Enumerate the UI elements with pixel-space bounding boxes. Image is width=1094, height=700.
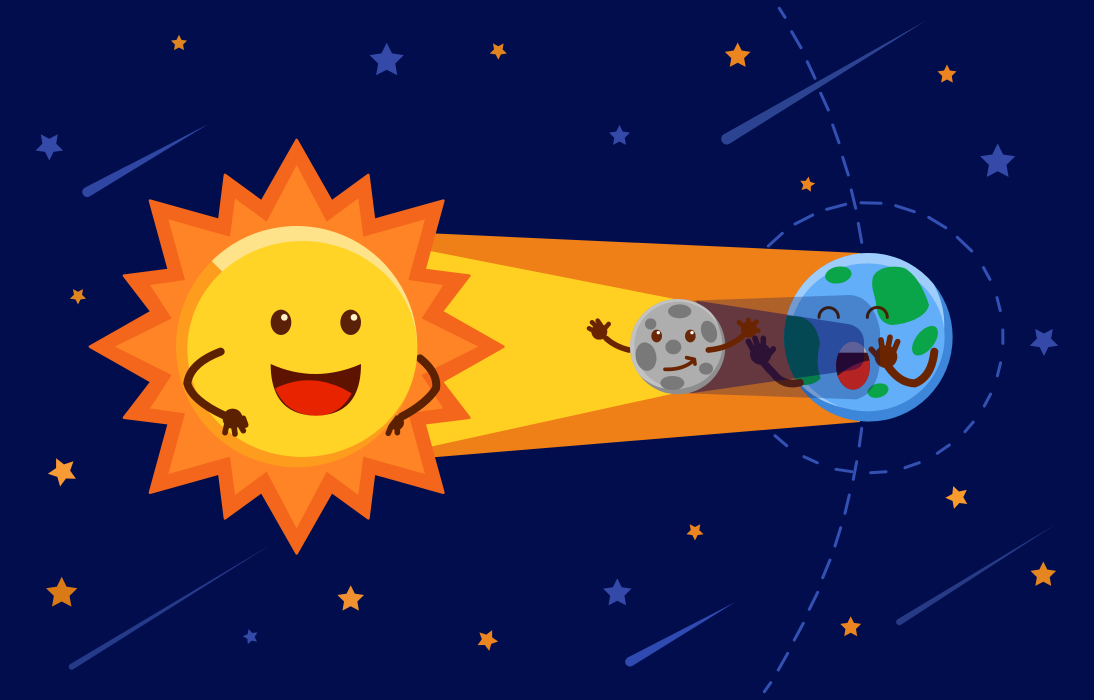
orbit paths xyxy=(764,8,1003,692)
shooting star: upper right xyxy=(719,16,929,147)
moon: smile xyxy=(665,358,695,369)
earth character xyxy=(748,241,953,422)
shadow: penumbra xyxy=(688,295,880,399)
sun character xyxy=(90,140,503,553)
moon: craters xyxy=(633,304,720,390)
moon character xyxy=(589,294,758,394)
shooting star: upper left xyxy=(80,120,211,199)
sun: right arm behind disc xyxy=(388,358,436,433)
shooting star: lower left xyxy=(68,542,273,671)
sun: outer rays xyxy=(90,140,503,553)
small dashed orbit around earth xyxy=(768,203,1003,473)
earth: left arm and hand xyxy=(748,338,800,384)
shooting star: lower right xyxy=(895,521,1058,626)
shadow: umbra xyxy=(690,301,864,393)
moon: body xyxy=(626,294,725,394)
earth: continents xyxy=(778,264,943,400)
beam: yellow inner xyxy=(420,249,690,449)
sun: disc xyxy=(176,226,417,467)
sun: smiling mouth xyxy=(271,364,361,416)
large dashed orbit xyxy=(764,8,862,692)
shooting star: lower middle xyxy=(623,598,738,668)
moon shadow xyxy=(688,295,880,399)
earth: open mouth xyxy=(836,342,870,390)
disc highlight crescent xyxy=(212,226,417,347)
earth: right arm and hand xyxy=(871,337,934,383)
earth: globe xyxy=(784,253,953,422)
moon: left arm and hand xyxy=(589,321,629,350)
beam: orange outer xyxy=(425,233,860,458)
sunlight beam xyxy=(420,233,860,458)
sun: inner rays xyxy=(115,165,478,528)
sun: eyes xyxy=(271,310,361,335)
earth: eyes xyxy=(819,307,887,317)
moon: right arm and hand xyxy=(708,320,758,350)
sun: left arm xyxy=(187,352,246,434)
moon: eyes xyxy=(651,330,696,342)
